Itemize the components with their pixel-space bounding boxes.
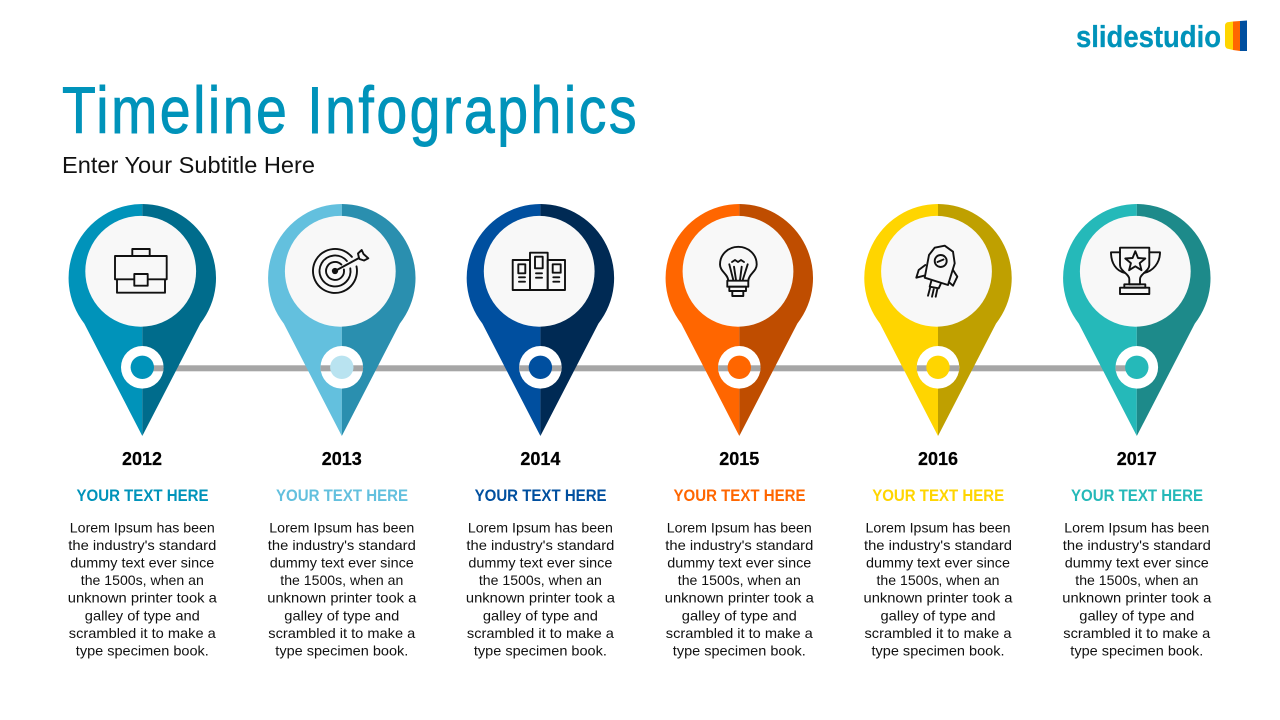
text block: 2015: YOUR TEXT HERE [674, 487, 806, 505]
text block: 2017: type specimen book. [1070, 642, 1203, 658]
text block: 2012: type specimen book. [76, 642, 209, 658]
text block: 2015: dummy text ever since [667, 554, 812, 570]
text block: 2016: unknown printer took a [864, 590, 1013, 606]
text block: 2014: unknown printer took a [466, 590, 615, 606]
text block: 2013 [267, 448, 417, 658]
text block: 2013: scrambled it to make a [268, 625, 416, 641]
text block: 2017: dummy text ever since [1065, 554, 1209, 570]
text block: 2017: the industry's standard [1063, 537, 1211, 553]
text block: 2012 [68, 448, 217, 658]
pin: 2014 [467, 204, 614, 436]
text block: 2013: galley of type and [284, 607, 399, 623]
text block: 2013: 2013 [322, 448, 362, 469]
pin: 2012 [69, 204, 216, 436]
text block: 2012: scrambled it to make a [69, 625, 216, 641]
logo: slidestudio: slidestudio [1076, 19, 1221, 54]
text block: 2012: 2012 [122, 448, 162, 469]
text block: 2017: the 1500s, when an [1075, 572, 1198, 588]
text block: 2014: galley of type and [483, 607, 598, 623]
pin: 2013 [268, 204, 416, 436]
text block: 2014: type specimen book. [474, 642, 607, 658]
text block: 2012: dummy text ever since [70, 554, 215, 570]
text block: 2017 [1062, 448, 1212, 658]
text block: 2015: the industry's standard [665, 537, 813, 553]
text block: 2016: scrambled it to make a [864, 625, 1012, 641]
text block: 2017: YOUR TEXT HERE [1071, 487, 1203, 505]
text block: 2013: YOUR TEXT HERE [276, 487, 408, 505]
text block: 2015: type specimen book. [673, 642, 806, 658]
text block: 2016: type specimen book. [872, 642, 1004, 658]
icon: trophy [1111, 248, 1160, 294]
icon: light bulb [720, 247, 757, 296]
text block: 2015: scrambled it to make a [666, 625, 813, 641]
text block: 2015: galley of type and [682, 607, 797, 623]
text block: 2012: YOUR TEXT HERE [76, 487, 208, 505]
text block: 2016: galley of type and [880, 607, 996, 623]
text block: 2014: the industry's standard [466, 537, 614, 553]
text block: 2013: unknown printer took a [267, 590, 417, 606]
text block: 2014: dummy text ever since [468, 554, 613, 570]
text block: 2017: scrambled it to make a [1063, 625, 1211, 641]
text block: 2013: type specimen book. [275, 642, 408, 658]
text block: 2016 [864, 448, 1013, 658]
text block: 2013: Lorem Ipsum has been [269, 519, 414, 535]
text block: 2012: galley of type and [85, 607, 200, 623]
icon: rocket [916, 246, 957, 297]
subtitle: Enter Your Subtitle Here [62, 152, 315, 178]
text block: 2013: the industry's standard [268, 537, 416, 553]
text block: 2015: unknown printer took a [665, 590, 814, 606]
text block: 2017: unknown printer took a [1062, 590, 1212, 606]
timeline axis [142, 365, 1137, 371]
text block: 2016: dummy text ever since [866, 554, 1010, 570]
pin: 2017 [1063, 204, 1211, 436]
text block: 2016: the industry's standard [864, 537, 1012, 553]
text block: 2012: the industry's standard [68, 537, 216, 553]
text block: 2015: Lorem Ipsum has been [667, 519, 812, 535]
text block: 2014: the 1500s, when an [479, 572, 602, 588]
text block: 2016: Lorem Ipsum has been [866, 519, 1010, 535]
text block: 2016: the 1500s, when an [876, 572, 1000, 588]
text block: 2017: galley of type and [1079, 607, 1194, 623]
text block: 2012: Lorem Ipsum has been [70, 519, 215, 535]
text block: 2014: 2014 [520, 448, 561, 469]
text block: 2014: YOUR TEXT HERE [475, 487, 607, 505]
text block: 2017: Lorem Ipsum has been [1064, 519, 1209, 535]
text block: 2013: the 1500s, when an [280, 572, 403, 588]
icon: books [513, 253, 565, 290]
icon: target with arrow [313, 249, 368, 293]
text block: 2017: 2017 [1117, 448, 1157, 469]
text block: 2014: scrambled it to make a [467, 625, 614, 641]
text block: 2015 [665, 448, 814, 658]
title: Timeline Infographics [62, 73, 637, 147]
text block: 2012: the 1500s, when an [81, 572, 204, 588]
text block: 2016: 2016 [918, 448, 958, 469]
text block: 2015: the 1500s, when an [678, 572, 801, 588]
text block: 2016: YOUR TEXT HERE [872, 487, 1004, 505]
text block: 2012: unknown printer took a [68, 590, 217, 606]
text block: 2014: Lorem Ipsum has been [468, 519, 613, 535]
text block: 2013: dummy text ever since [270, 554, 414, 570]
pin: 2016 [864, 204, 1012, 436]
text block: 2015: 2015 [719, 448, 759, 469]
text block: 2014 [466, 448, 615, 658]
icon: briefcase [115, 249, 167, 293]
pin: 2015 [666, 204, 813, 436]
